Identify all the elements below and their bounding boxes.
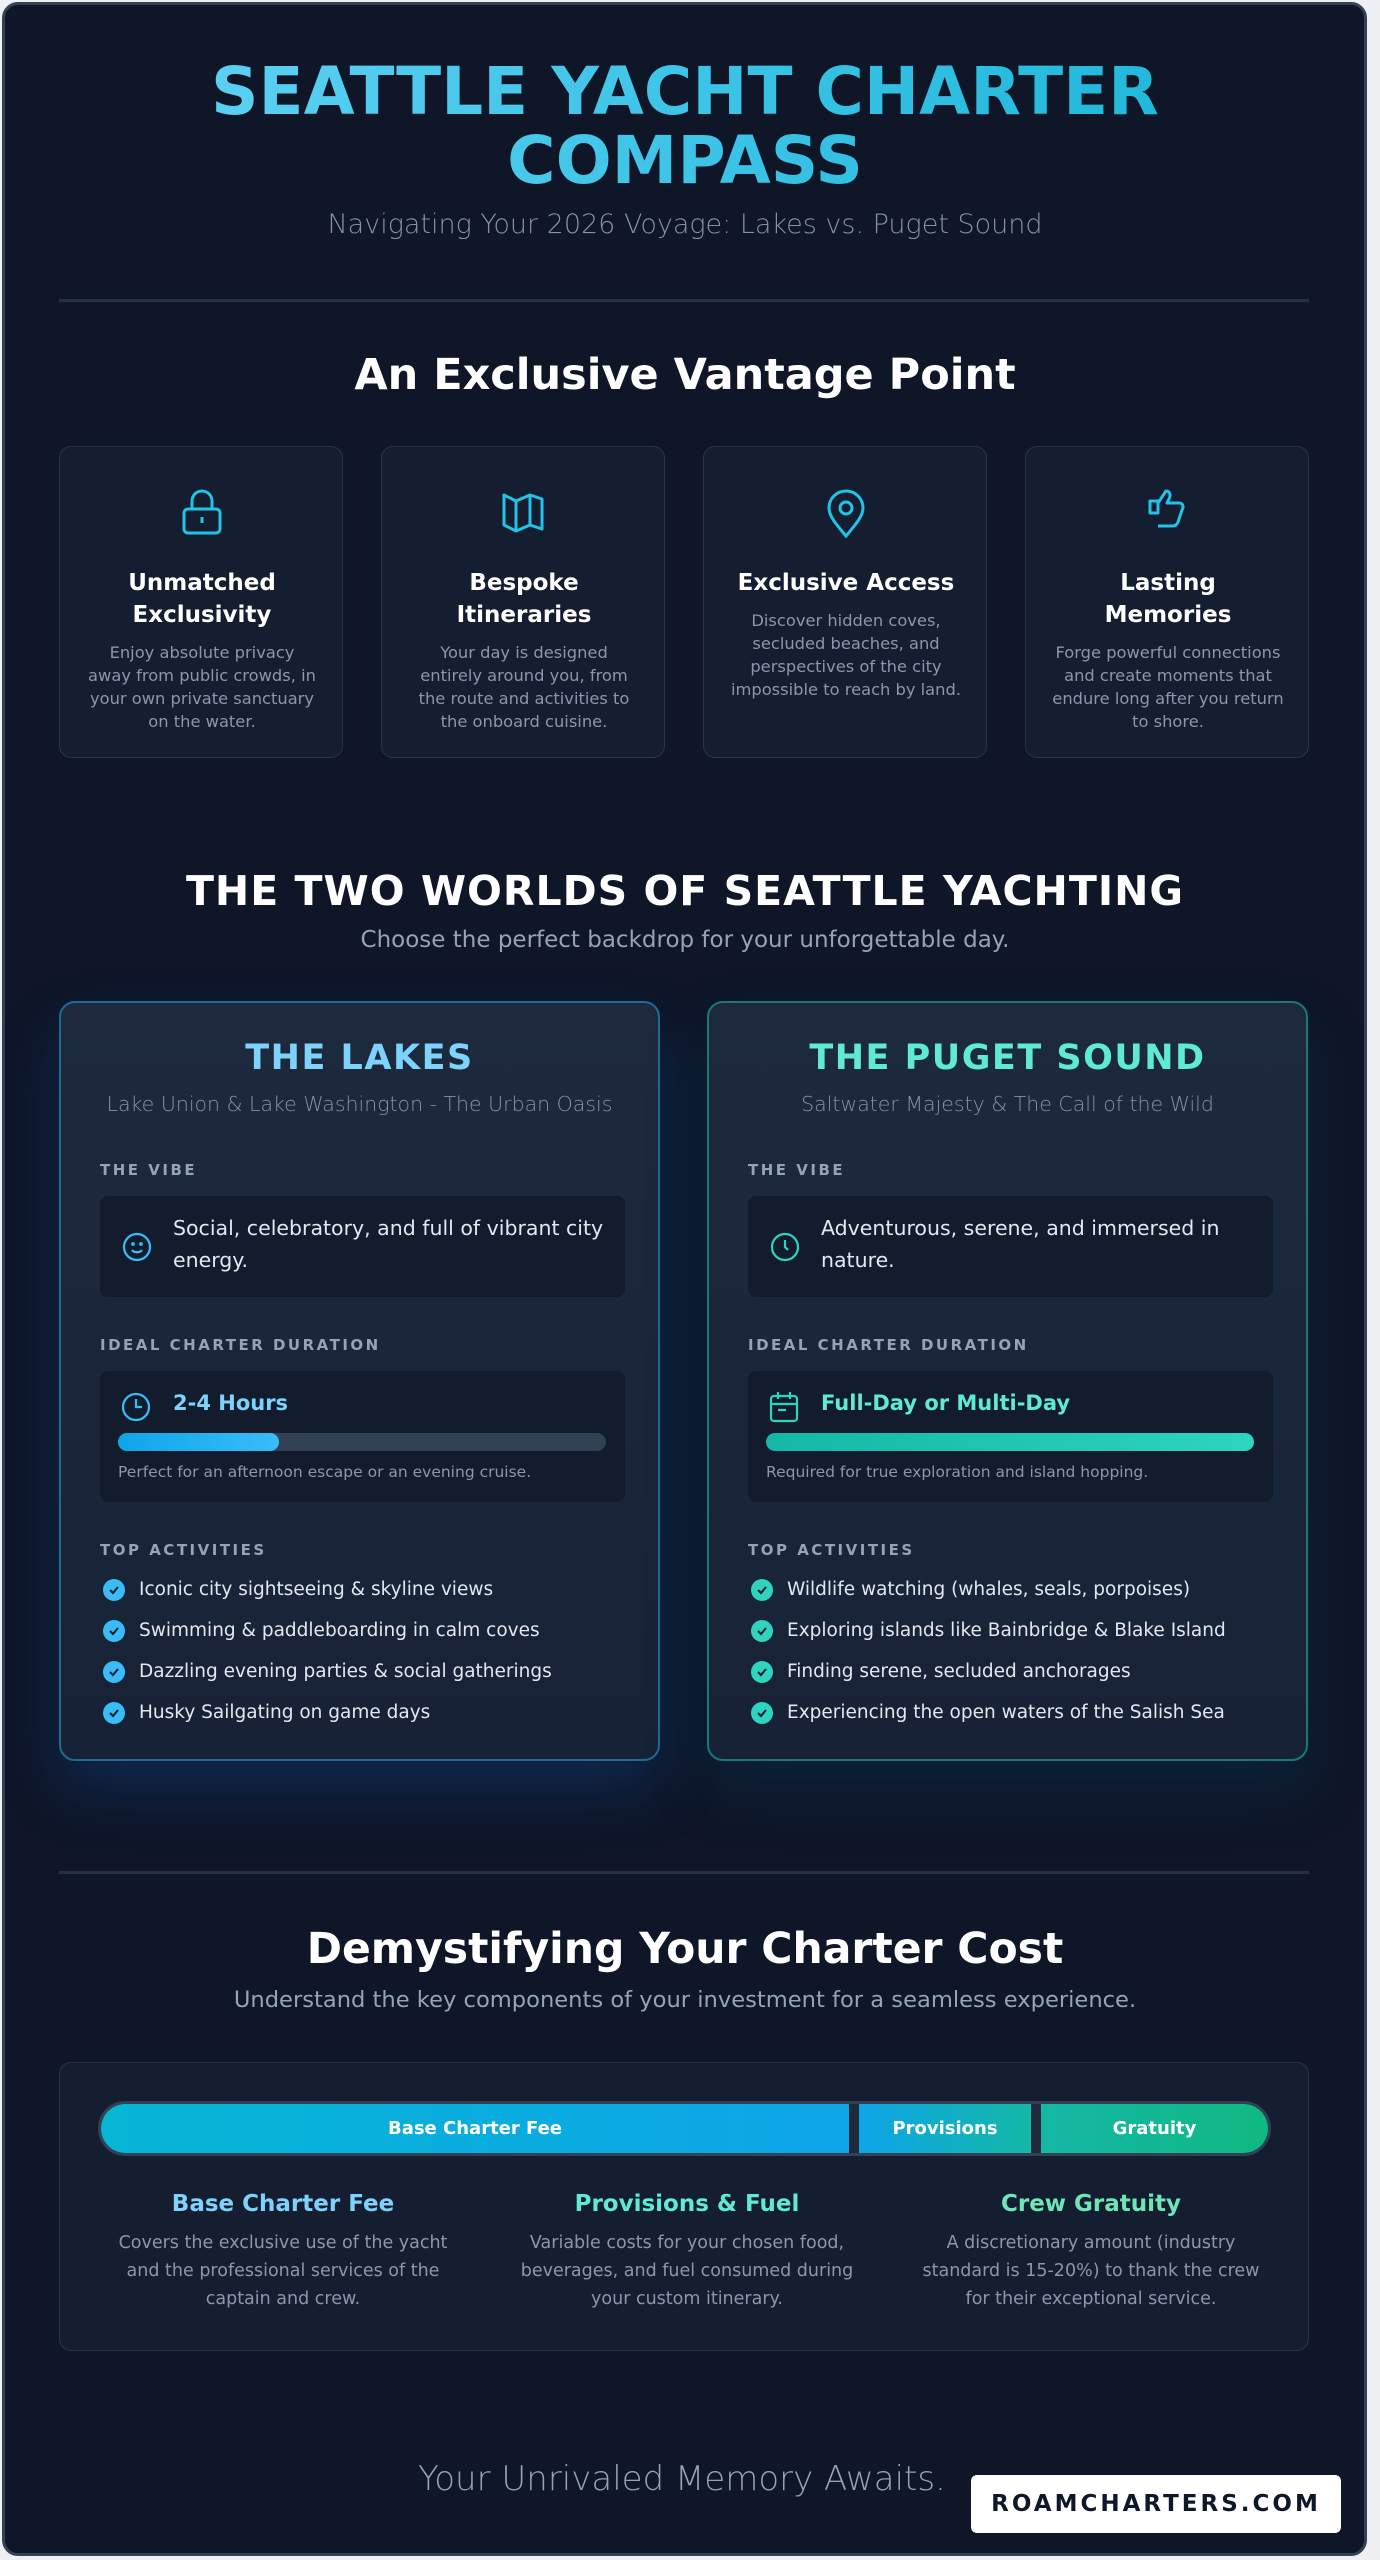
activity list: Dazzling evening parties & social gatherings <box>139 1661 552 1682</box>
text: perspectives of the city <box>750 657 942 676</box>
cost item: gratuity: Crew Gratuity <box>1001 2191 1181 2217</box>
label duration: IDEAL CHARTER DURATION <box>100 1336 381 1354</box>
text: Discover hidden coves, <box>751 611 941 630</box>
duration bar <box>766 1433 1254 1451</box>
text: Forge powerful connections <box>1056 643 1280 662</box>
text: Exclusivity <box>133 602 271 628</box>
vibe box <box>748 1196 1273 1297</box>
icon: smile <box>122 1232 152 1262</box>
text: impossible to reach by land. <box>731 680 961 699</box>
cost item: base <box>119 2191 447 2309</box>
footer button <box>971 2475 1341 2533</box>
duration bar <box>118 1433 606 1451</box>
heading: exclusive vantage: An Exclusive Vantage Point <box>354 350 1016 400</box>
text <box>1052 570 1284 731</box>
activity list: Iconic city sightseeing & skyline views <box>139 1579 493 1600</box>
heading: cost: Demystifying Your Charter Cost <box>307 1925 1063 1974</box>
icon: clock <box>770 1232 800 1262</box>
card: memories <box>1025 446 1309 758</box>
text <box>88 570 316 731</box>
text: Lasting <box>1120 570 1216 596</box>
text: the route and activities to <box>419 689 629 708</box>
cost item: gratuity <box>922 2191 1260 2309</box>
icon: pin <box>828 490 864 538</box>
panel title: THE LAKES <box>245 1038 474 1078</box>
text: and create moments that <box>1064 666 1272 685</box>
vibe box <box>100 1196 625 1297</box>
card: exclusivity <box>59 446 343 758</box>
label activities: TOP ACTIVITIES <box>100 1541 267 1559</box>
label vibe: THE VIBE <box>748 1161 845 1179</box>
stacked cost bar: Base Charter Fee <box>388 2118 562 2139</box>
cost item: base: Covers the exclusive use of the yacht and the professional services of the captain and crew. <box>119 2233 447 2309</box>
panel subtitle: Lake Union & Lake Washington - The Urban Oasis <box>107 1092 612 1116</box>
activity list: Wildlife watching (whales, seals, porpoises) <box>787 1579 1190 1600</box>
cost item: base: Base Charter Fee <box>172 2191 394 2217</box>
stacked cost bar: Provisions <box>892 2118 998 2139</box>
text: secluded beaches, and <box>752 634 940 653</box>
activity list <box>751 1579 1226 1724</box>
stacked cost bar: Gratuity <box>1113 2118 1196 2139</box>
text <box>419 570 629 731</box>
label vibe: THE VIBE <box>100 1161 197 1179</box>
text <box>731 570 961 699</box>
subtitle: Navigating Your 2026 Voyage: Lakes vs. Puget Sound <box>327 209 1043 240</box>
footer button: ROAMCHARTERS.COM <box>991 2491 1321 2517</box>
card: itineraries <box>381 446 665 758</box>
text: Enjoy absolute privacy <box>110 643 294 662</box>
text: Unmatched <box>128 570 276 596</box>
cost item: provisions: Provisions & Fuel <box>575 2191 799 2217</box>
icon: clock <box>122 1392 150 1422</box>
text: Exclusive Access <box>738 570 954 596</box>
vibe box: Adventurous, serene, and immersed in nature. <box>821 1216 1219 1272</box>
text: to shore. <box>1132 712 1204 731</box>
panel: cost breakdown <box>59 2062 1309 2351</box>
duration box: Full-Day or Multi-Day <box>821 1391 1070 1415</box>
text: Itineraries <box>457 602 591 628</box>
text: on the water. <box>148 712 256 731</box>
duration box: 2-4 Hours <box>173 1391 288 1415</box>
icon: map <box>502 494 544 532</box>
text: Bespoke <box>469 570 579 596</box>
label activities: TOP ACTIVITIES <box>748 1541 915 1559</box>
vibe box: Social, celebratory, and full of vibrant city energy. <box>173 1216 603 1272</box>
stacked cost bar <box>98 2101 1271 2156</box>
title: SEATTLE YACHT CHARTER <box>211 53 1159 130</box>
label duration: IDEAL CHARTER DURATION <box>748 1336 1029 1354</box>
panel title: THE PUGET SOUND <box>809 1038 1206 1078</box>
duration box <box>100 1371 625 1502</box>
text: Your day is designed <box>440 643 608 662</box>
activity list: Husky Sailgating on game days <box>139 1702 430 1723</box>
title <box>5 57 1365 195</box>
panel: lakes <box>59 1001 660 1761</box>
activity list <box>103 1579 552 1724</box>
text: your own private sanctuary <box>90 689 314 708</box>
duration box <box>748 1371 1273 1502</box>
icon: calendar <box>770 1392 798 1422</box>
text: Memories <box>1105 602 1231 628</box>
heading: two worlds: THE TWO WORLDS OF SEATTLE YACHTING <box>186 867 1184 915</box>
subheading cost: Understand the key components of your investment for a seamless experience. <box>234 1987 1136 2013</box>
duration box: Perfect for an afternoon escape or an evening cruise. <box>118 1463 531 1481</box>
cost item: gratuity: A discretionary amount (industry standard is 15-20%) to thank the crew for their exceptional service. <box>922 2233 1260 2309</box>
text: the onboard cuisine. <box>441 712 607 731</box>
text: away from public crowds, in <box>88 666 316 685</box>
panel: puget sound <box>707 1001 1308 1761</box>
icon: lock <box>182 490 222 534</box>
activity list: Finding serene, secluded anchorages <box>787 1661 1131 1682</box>
panel subtitle: Saltwater Majesty & The Call of the Wild <box>801 1092 1214 1116</box>
activity list: Swimming & paddleboarding in calm coves <box>139 1620 540 1641</box>
text: entirely around you, from <box>420 666 628 685</box>
icon: thumbs up <box>1148 490 1184 528</box>
cost item: provisions: Variable costs for your chosen food, beverages, and fuel consumed during your custom itinerary. <box>521 2233 853 2309</box>
card: access <box>703 446 987 758</box>
duration box: Required for true exploration and island hopping. <box>766 1463 1148 1481</box>
subheading: Choose the perfect backdrop for your unforgettable day. <box>361 927 1009 953</box>
text: endure long after you return <box>1052 689 1284 708</box>
activity list: Exploring islands like Bainbridge & Blake Island <box>787 1620 1226 1641</box>
footer tagline: Your Unrivaled Memory Awaits. <box>418 2459 946 2499</box>
title: COMPASS <box>507 122 863 199</box>
cost item: provisions <box>521 2191 853 2309</box>
activity list: Experiencing the open waters of the Salish Sea <box>787 1702 1225 1723</box>
